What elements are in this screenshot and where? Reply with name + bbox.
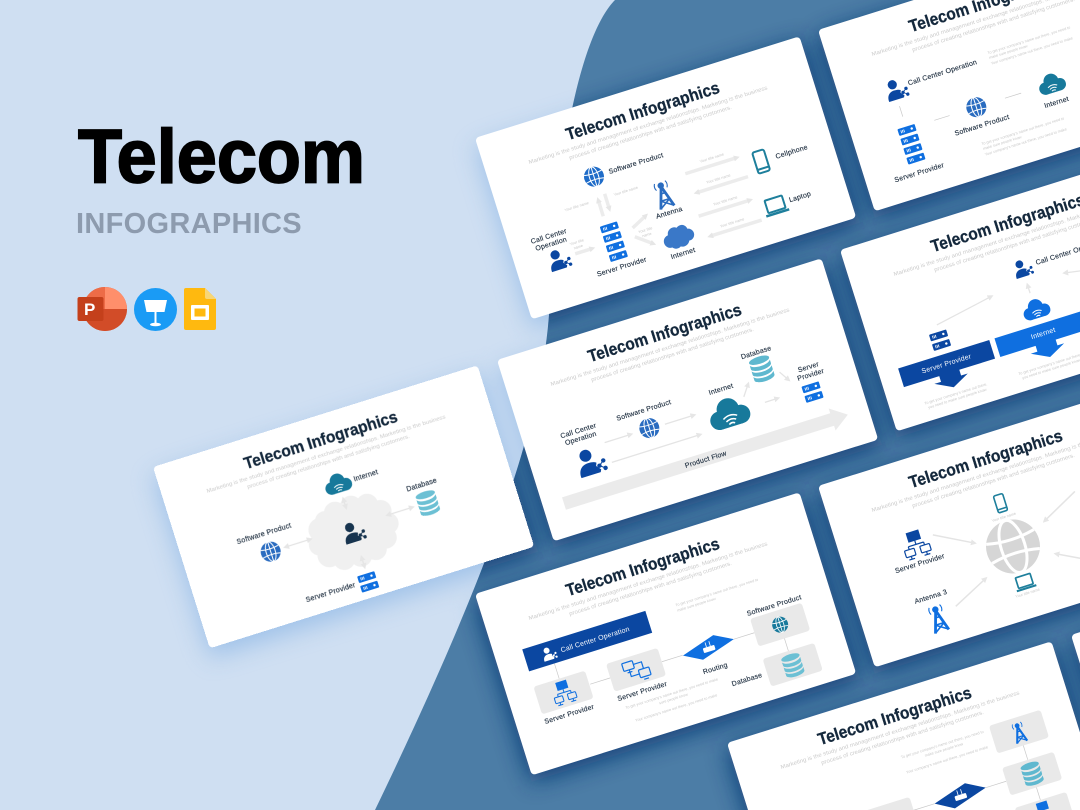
- double arrows: [280, 483, 422, 584]
- label: server provider: Server Provider: [305, 582, 357, 604]
- icon: PowerPoint: [78, 287, 127, 331]
- background: curved steel-blue shape: [375, 0, 1080, 810]
- slide B title: Telecom Infographics: [241, 407, 400, 473]
- slide A description: Marketing is the study and management of exchange relationships. Marketing is the business: [528, 85, 769, 166]
- label: database: Database: [731, 672, 763, 688]
- arrows with small labels: Your title name: [564, 201, 589, 212]
- arrows with small labels: Your title name: [613, 186, 638, 197]
- note top: To get your company's name out there, you need to: [987, 26, 1071, 55]
- icon: server: [801, 381, 824, 403]
- box: server provider A: [533, 671, 594, 714]
- icon: software globe: [258, 539, 283, 564]
- label: call center operation: Call Center: [530, 228, 568, 246]
- note top: Your company's name out there, you need to make: [990, 36, 1073, 66]
- subheading: INFOGRAPHICS: [76, 208, 302, 240]
- icon: internet: [1036, 70, 1068, 96]
- panel: slide H bottom right: [727, 641, 1080, 810]
- icon: internet cloud: [660, 222, 697, 252]
- notes: you need to make sure people know: [928, 388, 987, 410]
- icon: internet: [1020, 295, 1052, 322]
- note text bottom: To get your company's name out there, you need to make: [625, 677, 719, 710]
- note text: Your company's name out there, you need to make: [906, 745, 989, 775]
- big product flow arrow: [561, 404, 851, 515]
- icon: call center person: [546, 246, 573, 272]
- label: internet: Internet: [353, 469, 379, 483]
- label: internet: Internet: [670, 247, 696, 261]
- banner: internet: [994, 279, 1080, 371]
- label: server provider: [794, 360, 826, 383]
- slide H description: Marketing is the study and management of exchange relationships. Marketing is the business: [780, 690, 1021, 771]
- note text bottom: [625, 677, 723, 724]
- note text top: make sure people know: [677, 597, 716, 613]
- label: call center operation: Operation: [564, 431, 598, 447]
- notes: [924, 353, 1080, 410]
- label: internet: Internet: [1044, 96, 1070, 110]
- label: server provider: Server: [797, 361, 820, 374]
- label: antenna 3: Antenna 3: [914, 589, 948, 606]
- slide D title: Telecom Infographics: [563, 534, 722, 600]
- icon: server: [357, 571, 379, 593]
- label: software product: Software Product: [746, 594, 802, 618]
- label: database: Database: [406, 477, 438, 494]
- icon: person: [574, 445, 608, 478]
- arrows with small labels: [557, 148, 762, 277]
- icon: PowerPoint: P: [84, 300, 95, 319]
- panel: slide E top right: [818, 0, 1080, 211]
- note top: make sure people know: [989, 44, 1028, 60]
- diamond: routing: [932, 778, 989, 810]
- label: call center operation: Operation: [535, 236, 568, 253]
- box: database: [763, 643, 823, 687]
- note text: make sure people know: [924, 742, 964, 758]
- slide H title: Telecom Infographics: [815, 683, 974, 749]
- diamond: routing: [680, 630, 737, 665]
- icon: antenna: [653, 180, 674, 210]
- icon: person: [883, 76, 910, 102]
- card shadows on steel-blue shape: [466, 0, 1080, 810]
- icon: internet: [322, 470, 354, 496]
- note text bottom: Your company's name out there, you need to make: [635, 693, 718, 723]
- panel: slide G globe: [818, 384, 1080, 667]
- icon: person: [1012, 257, 1034, 279]
- main heading: Telecom: [78, 114, 365, 200]
- label: laptop title: Your title name: [1015, 588, 1040, 599]
- icon: phone: [993, 493, 1008, 513]
- banner: server provider: [898, 340, 1000, 401]
- label: software product: Software Product: [236, 522, 292, 546]
- label: phone title: Your title name: [991, 512, 1016, 523]
- box: database: [1002, 752, 1062, 796]
- label: call center: Call Center Operation: [907, 59, 978, 87]
- slide H description: process of creating relationships with and satisfying customers.: [821, 710, 985, 767]
- icon: cellphone: [752, 149, 770, 174]
- slide B description: Marketing is the study and management of exchange relationships. Marketing is the business: [206, 414, 447, 495]
- note text: [901, 730, 989, 775]
- slide A title: Telecom Infographics: [563, 78, 722, 144]
- arrows with small labels: name: [642, 232, 652, 238]
- label: cellphone: Cellphone: [775, 144, 809, 161]
- label: software product: Software Product: [954, 114, 1010, 138]
- label: server provider: Server Provider: [894, 553, 946, 575]
- label: server provider A: Server Provider: [544, 704, 596, 726]
- label: laptop: Laptop: [788, 191, 812, 204]
- icon: database: [748, 354, 776, 384]
- connector arrows: [934, 255, 1080, 325]
- connector lines: [899, 70, 1021, 129]
- note text: To get your company's name out there, you need to: [901, 730, 984, 760]
- slide C description: process of creating relationships with and satisfying customers.: [591, 327, 755, 384]
- label: call center operation: [530, 228, 571, 253]
- arrows with small labels: Your title name: [720, 217, 745, 229]
- arrows with small labels: name: [573, 244, 583, 250]
- slide C description: Marketing is the study and management of exchange relationships. Marketing is the business: [550, 307, 791, 388]
- label: software product: Software Product: [616, 399, 672, 423]
- icon: large grey globe: [979, 513, 1047, 580]
- icon: database: [415, 489, 441, 518]
- banner: server provider: Server Provider: [921, 353, 973, 375]
- box: server provider B: [606, 648, 666, 692]
- label: call center operation: Call Center: [560, 422, 598, 440]
- label: routing: Routing: [702, 662, 729, 676]
- slide G description: process of creating relationships with and satisfying customers.: [912, 453, 1076, 510]
- box: left: [858, 797, 918, 810]
- notes: To get your company's name out there,: [924, 382, 988, 406]
- box: antenna: [989, 710, 1049, 754]
- banner: call center operation: Call Center Operation: [560, 626, 631, 654]
- box: software product: [750, 603, 810, 647]
- note bottom: Your company's name out there, you need to make: [984, 127, 1067, 157]
- arrows with small labels: Your title name: [713, 195, 738, 207]
- banner: internet: Internet: [1030, 327, 1057, 341]
- arrows to globe: [933, 490, 1080, 606]
- slide A description: process of creating relationships with and satisfying customers.: [569, 105, 733, 162]
- panel: slide I far corner: [1071, 533, 1080, 810]
- note text bottom: sure people know: [659, 693, 689, 705]
- label: server provider: Server Provider: [894, 162, 946, 184]
- panel: slide F banners: [840, 148, 1080, 431]
- icon: central person: [341, 519, 367, 545]
- panel: slide B cloud hub: [153, 365, 534, 648]
- slide D description: Marketing is the study and management of exchange relationships. Marketing is the business: [528, 541, 769, 622]
- slide G title: Telecom Infographics: [906, 426, 1065, 492]
- label: internet: Internet: [708, 383, 734, 397]
- icon: laptop: [762, 195, 789, 216]
- label: server provider B: Server Provider: [617, 681, 669, 703]
- icon: server: [897, 124, 926, 165]
- icon: software product globe: [581, 164, 607, 189]
- note bottom: To get your company's name out there, you need to: [981, 117, 1065, 146]
- label: database: Database: [740, 345, 772, 361]
- label: server provider: Server Provider: [596, 256, 648, 279]
- icon: globe: [637, 416, 662, 441]
- panel: slide D routing diagram: [475, 492, 856, 775]
- label: software product: Software Product: [608, 152, 664, 176]
- slide C title: Telecom Infographics: [585, 300, 744, 366]
- connector lines: [905, 746, 1040, 810]
- icon: network: [900, 528, 932, 561]
- icon: globe: [964, 95, 989, 120]
- banner: call center operation: [522, 611, 652, 671]
- connector arrows: [600, 371, 795, 463]
- notes: you need to make sure people know: [1022, 358, 1080, 380]
- label: server provider: Provider: [797, 368, 826, 383]
- label: call center operation: [560, 422, 600, 448]
- icon: laptop: [1013, 573, 1036, 591]
- slide B description: process of creating relationships with and satisfying customers.: [247, 434, 411, 491]
- icon: Google Slides: [184, 288, 216, 330]
- icon: server: [929, 329, 951, 351]
- arrows with small labels: Your title name: [699, 152, 724, 164]
- icon: Keynote: [134, 288, 177, 331]
- card shadows on light background: [154, 44, 883, 784]
- slide D description: process of creating relationships with and satisfying customers.: [569, 561, 733, 618]
- note bottom: make sure people know: [983, 135, 1022, 151]
- arrows with small labels: Your title name: [706, 173, 731, 185]
- icon: server stack: [600, 221, 628, 262]
- connector lines: [554, 596, 788, 719]
- icon: internet: [705, 393, 753, 432]
- arrows with small labels: Your title: [569, 238, 584, 246]
- icon: antenna: [928, 604, 949, 634]
- box: network: [1015, 792, 1075, 810]
- note text top: To get your company's name out there, you need to: [675, 578, 759, 607]
- panel: slide A network map: [475, 36, 856, 319]
- arrows with small labels: Your title: [638, 226, 653, 234]
- central grey cloud: [298, 484, 408, 580]
- notes: To get your company's name out there,: [1018, 353, 1080, 376]
- slide E description: process of creating relationships with and satisfying customers.: [912, 0, 1076, 54]
- panel: slide C product flow: [497, 258, 878, 541]
- label: product flow: Product Flow: [684, 450, 728, 470]
- label: antenna: Antenna: [655, 206, 684, 221]
